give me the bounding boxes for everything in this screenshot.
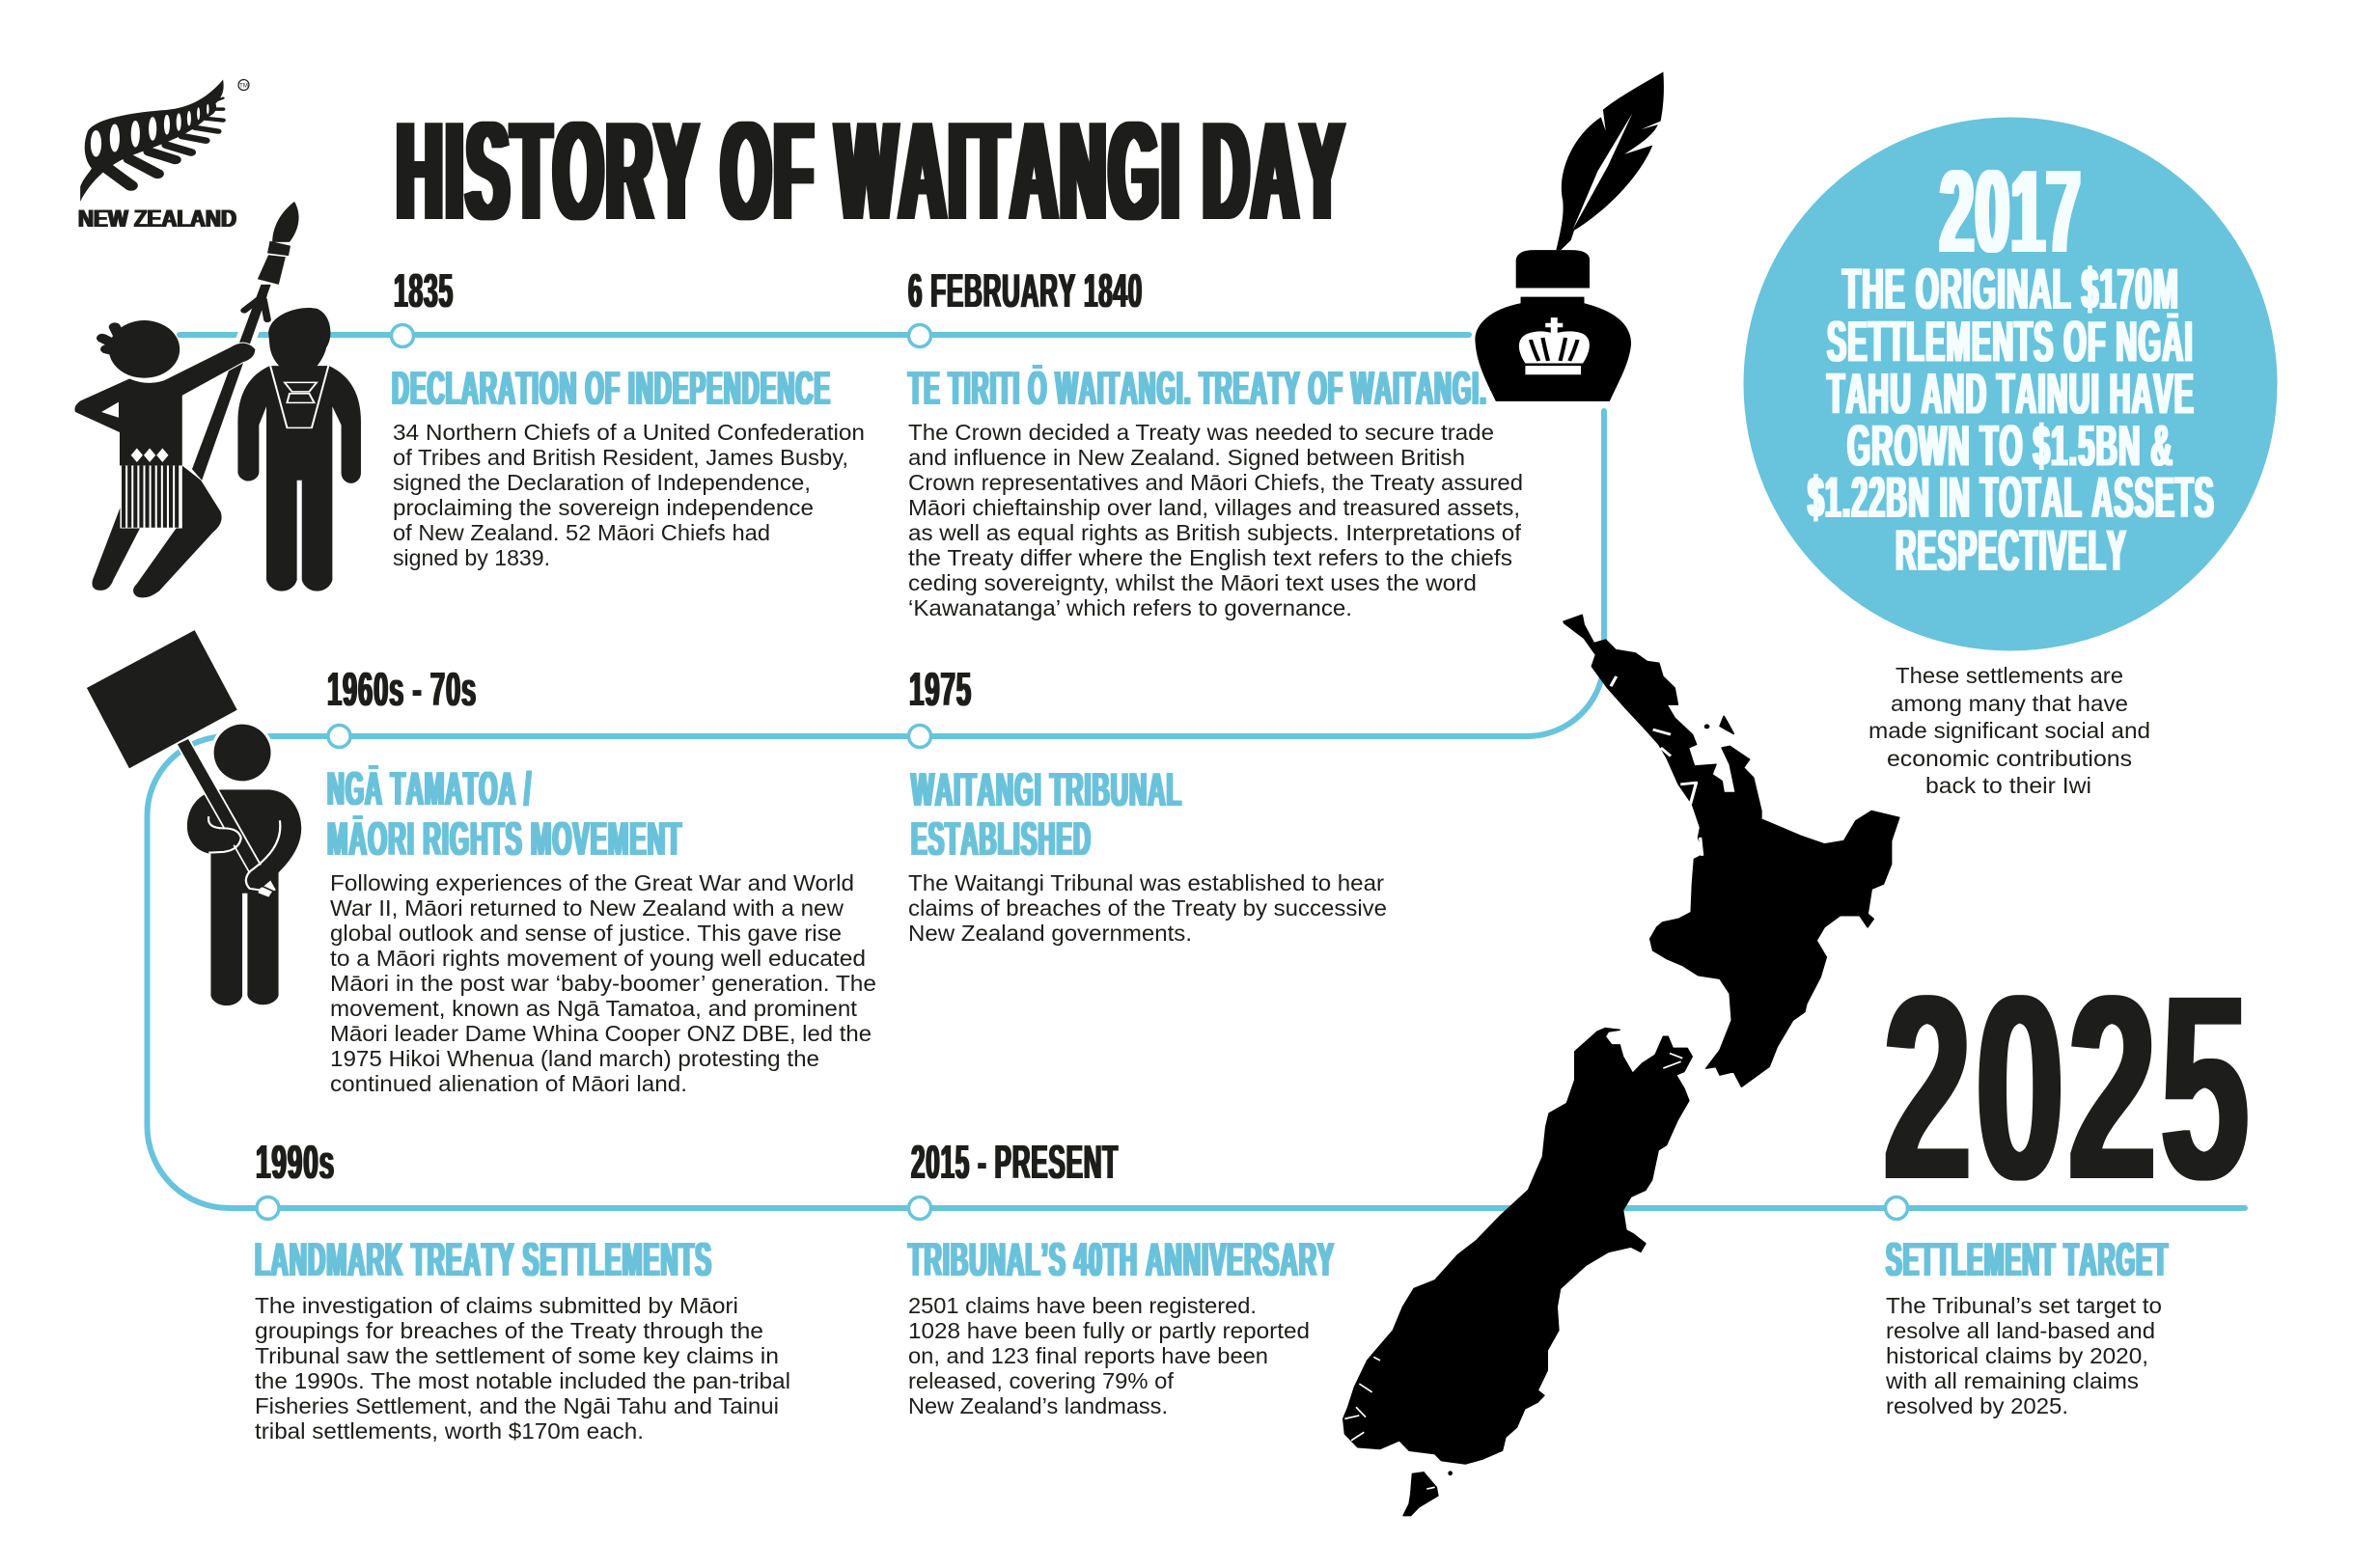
text: settlement target: resolved by 2025. xyxy=(1886,1393,2068,1418)
text: 40th anniversary: released, covering 79% of xyxy=(908,1368,1174,1393)
text: tribunal established: New Zealand governments. xyxy=(908,921,1192,946)
text: tribunal established: The Waitangi Tribunal was established to hear xyxy=(908,870,1384,895)
circle callout: 2017: RESPECTIVELY xyxy=(1896,518,2127,583)
text: Nga Tamatoa: 1975 Hikoi Whenua (land march) protesting the xyxy=(330,1046,819,1071)
text: declaration: of New Zealand. 52 Māori Chiefs had xyxy=(393,520,770,545)
text: Nga Tamatoa: continued alienation of Māori land. xyxy=(330,1071,687,1096)
text: treaty: as well as equal rights as British subjects. Interpretations of xyxy=(908,520,1521,545)
text: 40th anniversary: 1028 have been fully or partly reported xyxy=(908,1318,1310,1343)
date: 1835: 1835 xyxy=(394,265,454,317)
heading: tribunal established: ESTABLISHED xyxy=(911,813,1092,866)
text: declaration: signed the Declaration of Independence, xyxy=(393,470,811,495)
text: Nga Tamatoa: to a Māori rights movement of young well educated xyxy=(330,946,866,971)
text: 40th anniversary: on, and 123 final reports have been xyxy=(908,1343,1268,1368)
heading: 40th anniversary: TRIBUNAL’S 40TH ANNIVERSARY xyxy=(908,1234,1335,1286)
date: 2015 - present: 2015 - PRESENT xyxy=(911,1137,1119,1189)
icon: protester with placard xyxy=(86,629,301,1005)
date: 6 February 1840: 6 FEBRUARY 1840 xyxy=(908,265,1143,317)
milestone node 1975 xyxy=(909,726,930,747)
milestone node 2025 xyxy=(1886,1197,1907,1220)
logo: New Zealand fern xyxy=(78,79,249,233)
milestone node 2015 xyxy=(909,1197,930,1220)
text: Nga Tamatoa: movement, known as Ngā Tamatoa, and prominent xyxy=(330,996,857,1021)
heading: declaration: DECLARATION OF INDEPENDENCE xyxy=(392,363,831,415)
milestone node 1960s xyxy=(328,726,350,747)
text: settlement target: historical claims by 2020, xyxy=(1886,1343,2148,1368)
text: declaration xyxy=(393,420,865,570)
heading: Nga Tamatoa xyxy=(327,763,682,866)
text: settlements note: among many that have xyxy=(1891,691,2128,716)
timeline path xyxy=(147,335,2245,1208)
text: treaty: Māori chieftainship over land, villages and treasured assets, xyxy=(908,495,1520,520)
icon: quill and ink bottle xyxy=(1475,71,1664,401)
text: settlements note: back to their Iwi xyxy=(1925,773,2091,798)
heading: tribunal established xyxy=(911,764,1182,866)
logo: New Zealand fern: TM xyxy=(239,83,248,89)
text: settlement target: resolve all land-based and xyxy=(1886,1318,2155,1343)
milestone node 1840 xyxy=(909,324,930,347)
heading: treaty: TE TIRITI Ō WAITANGI. TREATY OF WAITANGI. xyxy=(908,363,1487,415)
text: 40th anniversary xyxy=(908,1293,1310,1418)
text: landmark settlements: Fisheries Settlement, and the Ngāi Tahu and Tainui xyxy=(255,1393,779,1418)
date: 1975: 1975 xyxy=(909,664,972,716)
text: Nga Tamatoa: global outlook and sense of justice. This gave rise xyxy=(330,921,842,946)
icon: Maori warrior and British chief figures xyxy=(74,202,361,597)
circle callout: 2017: 2017 xyxy=(1940,146,2082,277)
text: settlement target xyxy=(1885,1293,2162,1418)
text: settlements note: made significant social and xyxy=(1869,718,2150,743)
heading: tribunal established: WAITANGI TRIBUNAL xyxy=(911,764,1182,816)
text: treaty: Crown representatives and Māori Chiefs, the Treaty assured xyxy=(908,470,1523,495)
text: landmark settlements xyxy=(255,1293,790,1444)
text: Nga Tamatoa: Māori in the post war ‘baby-boomer’ generation. The xyxy=(330,971,876,996)
text: settlements note xyxy=(1869,663,2150,798)
milestone node 1835 xyxy=(392,324,413,347)
text: treaty: and influence in New Zealand. Signed between British xyxy=(908,445,1465,470)
text: Nga Tamatoa: Following experiences of the Great War and World xyxy=(330,870,854,895)
map: South Island xyxy=(1343,1029,1692,1516)
text: declaration: of Tribes and British Resident, James Busby, xyxy=(393,445,848,470)
text: settlements note: economic contributions xyxy=(1887,746,2132,771)
text: treaty: the Treaty differ where the English text refers to the chiefs xyxy=(908,545,1512,570)
text: landmark settlements: groupings for breaches of the Treaty through the xyxy=(255,1318,763,1343)
text: Nga Tamatoa xyxy=(330,870,876,1096)
text: landmark settlements: Tribunal saw the settlement of some key claims in xyxy=(255,1343,779,1368)
text: treaty: The Crown decided a Treaty was needed to secure trade xyxy=(908,420,1494,445)
text: landmark settlements: The investigation of claims submitted by Māori xyxy=(255,1293,738,1318)
text: Nga Tamatoa: War II, Māori returned to New Zealand with a new xyxy=(330,895,844,921)
text: landmark settlements: the 1990s. The most notable included the pan-tribal xyxy=(255,1368,790,1393)
text: tribunal established xyxy=(908,870,1387,946)
text: Nga Tamatoa: Māori leader Dame Whina Cooper ONZ DBE, led the xyxy=(330,1021,872,1046)
date: 1960s - 70s: 1960s - 70s xyxy=(327,664,477,716)
circle callout: 2017 xyxy=(1743,118,2278,650)
text: treaty: ceding sovereignty, whilst the Māori text uses the word xyxy=(908,570,1477,595)
text: treaty xyxy=(908,420,1523,620)
text: settlement target: The Tribunal’s set target to xyxy=(1886,1293,2162,1318)
map: North Island xyxy=(1564,615,1899,1087)
heading: Nga Tamatoa: MĀORI RIGHTS MOVEMENT xyxy=(327,813,682,866)
text: 40th anniversary: 2501 claims have been registered. xyxy=(908,1293,1257,1318)
heading: landmark settlements: LANDMARK TREATY SETTLEMENTS xyxy=(255,1234,712,1286)
text: tribunal established: claims of breaches of the Treaty by successive xyxy=(908,895,1387,921)
text: landmark settlements: tribal settlements, worth $170m each. xyxy=(255,1418,644,1444)
text: treaty: ‘Kawanatanga’ which refers to governance. xyxy=(908,595,1352,620)
logo: New Zealand fern: NEW ZEALAND xyxy=(78,206,236,233)
text: declaration: 34 Northern Chiefs of a United Confederation xyxy=(393,420,865,445)
text: declaration: signed by 1839. xyxy=(393,545,550,570)
text: settlement target: with all remaining claims xyxy=(1885,1368,2139,1393)
milestone node 1990s xyxy=(257,1197,279,1220)
date: 1990s: 1990s xyxy=(256,1137,335,1189)
text: 40th anniversary: New Zealand’s landmass. xyxy=(908,1393,1168,1418)
heading: Nga Tamatoa: NGĀ TAMATOA / xyxy=(327,763,532,815)
text: declaration: proclaiming the sovereign independence xyxy=(393,495,814,520)
text: settlements note: These settlements are xyxy=(1896,663,2123,688)
